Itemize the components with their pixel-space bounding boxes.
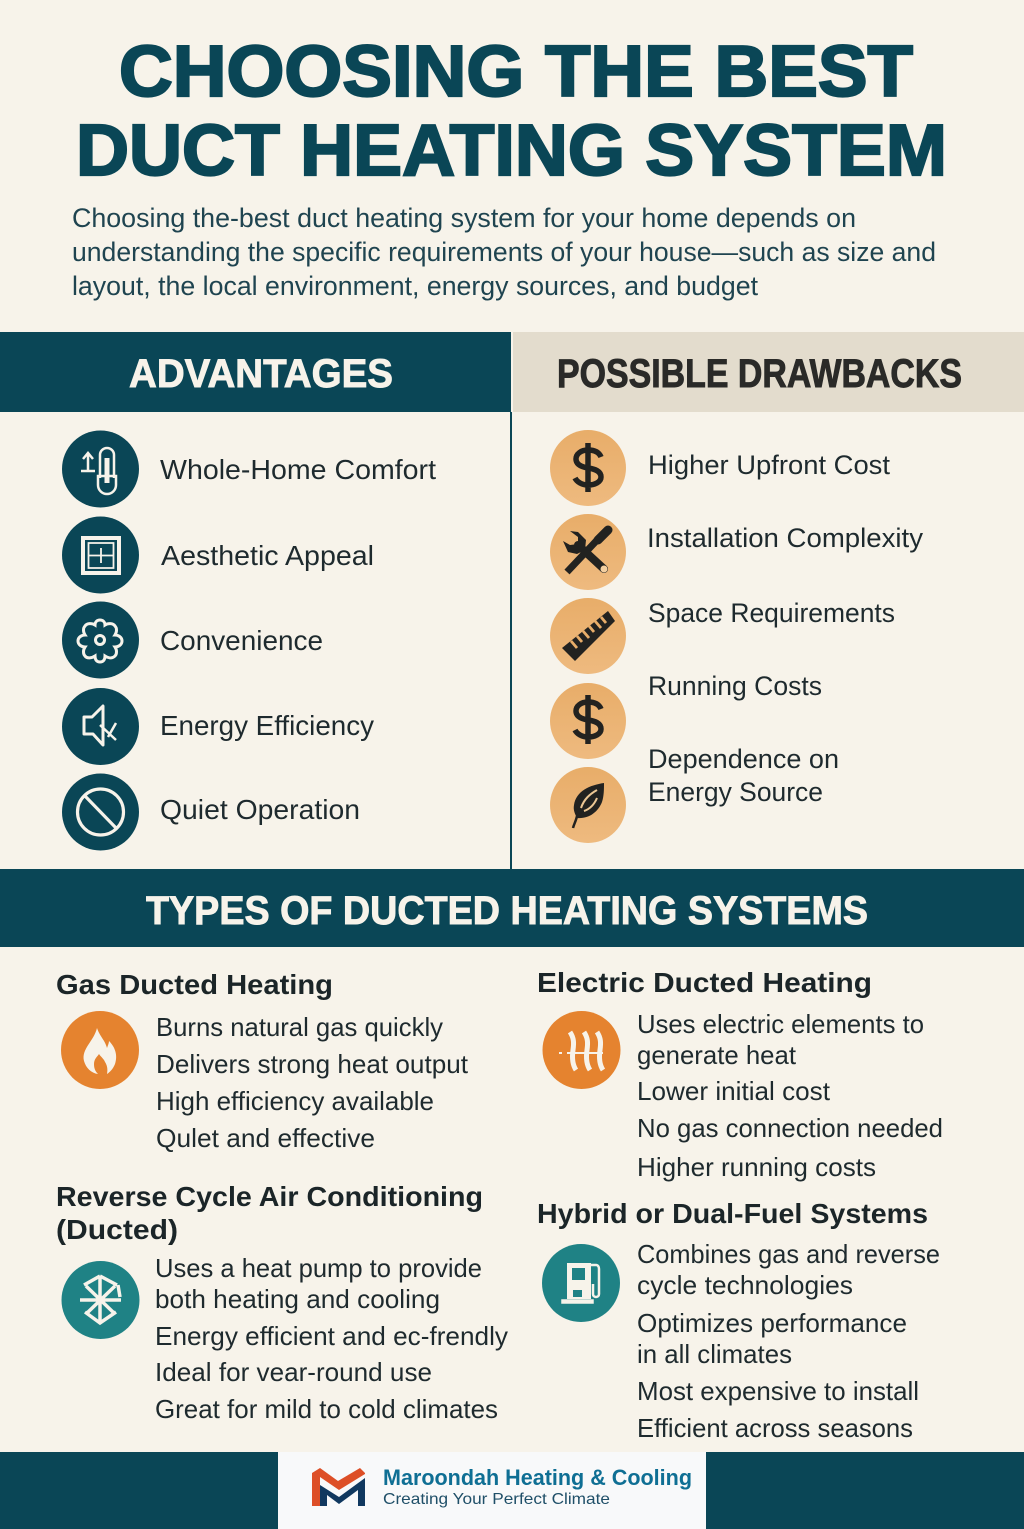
label: Higher Upfront Cost bbox=[648, 450, 890, 480]
label: Space Requirements bbox=[648, 598, 895, 628]
icon: leaf bbox=[550, 767, 626, 843]
brand text bbox=[383, 1465, 692, 1508]
icon: dollar bbox=[550, 430, 626, 506]
list: Efficient across seasons bbox=[637, 1413, 913, 1443]
list: High efficiency available bbox=[156, 1086, 434, 1116]
label: Dependence on bbox=[648, 744, 839, 774]
icon: fuel pump bbox=[542, 1244, 620, 1322]
icon: heating elements bbox=[542, 1011, 620, 1089]
icon: ruler bbox=[550, 598, 626, 674]
icon: prohibited bbox=[62, 774, 139, 850]
list bbox=[637, 1009, 943, 1182]
icon: logo mark bbox=[312, 1468, 365, 1506]
brand text: Creating Your Perfect Climate bbox=[383, 1491, 610, 1508]
panel: reverse cycle air conditioning: (Ducted) bbox=[56, 1214, 178, 1245]
list bbox=[155, 1253, 508, 1424]
icon: dollar bbox=[550, 683, 626, 759]
label: Energy Source bbox=[648, 777, 823, 807]
section band: types heading bbox=[0, 869, 1024, 947]
list: Uses a heat pump to provide bbox=[155, 1253, 482, 1283]
panel: drawbacks header bbox=[513, 332, 1024, 412]
intro text: Choosing the-best duct heating system for your home depends on bbox=[72, 203, 856, 233]
icon: thermometer bbox=[62, 430, 139, 508]
list bbox=[156, 1012, 469, 1153]
list: Qulet and effective bbox=[156, 1123, 375, 1153]
label: Running Costs bbox=[648, 671, 822, 701]
title: DUCT HEATING SYSTEM bbox=[76, 111, 947, 191]
title: CHOOSING THE BEST bbox=[119, 32, 913, 112]
icon: window bbox=[62, 516, 139, 594]
panel: drawbacks header: POSSIBLE DRAWBACKS bbox=[557, 352, 962, 396]
brand text: Maroondah Heating & Cooling bbox=[383, 1465, 692, 1490]
icon: snowflake bbox=[62, 1261, 140, 1339]
panel: advantages header bbox=[0, 332, 511, 412]
panel: hybrid or dual-fuel systems bbox=[537, 1198, 940, 1443]
label bbox=[648, 744, 839, 807]
list: in all climates bbox=[637, 1339, 792, 1369]
panel: electric ducted heating: Electric Ducted Heating bbox=[537, 967, 872, 998]
list: Lower initial cost bbox=[637, 1076, 831, 1106]
intro text: understanding the specific requirements of your house—such as size and bbox=[72, 237, 936, 267]
label: Aesthetic Appeal bbox=[161, 540, 374, 571]
list: Optimizes performance bbox=[637, 1308, 907, 1338]
list: Uses electric elements to bbox=[637, 1009, 924, 1039]
list: Great for mild to cold climates bbox=[155, 1394, 498, 1424]
list: both heating and cooling bbox=[155, 1284, 440, 1314]
label: Quiet Operation bbox=[160, 794, 360, 825]
label: Convenience bbox=[160, 625, 323, 656]
list: Delivers strong heat output bbox=[156, 1049, 469, 1079]
panel: reverse cycle air conditioning bbox=[56, 1181, 508, 1424]
icon: flame bbox=[61, 1011, 139, 1089]
panel: hybrid or dual-fuel systems: Hybrid or Dual-Fuel Systems bbox=[537, 1198, 928, 1229]
icon: tools bbox=[550, 514, 626, 590]
panel: drawbacks list bbox=[550, 430, 924, 843]
label: Installation Complexity bbox=[647, 523, 924, 553]
panel: reverse cycle air conditioning: Reverse Cycle Air Conditioning bbox=[56, 1181, 483, 1212]
list: Energy efficient and ec-frendly bbox=[155, 1321, 508, 1351]
list: cycle technologies bbox=[637, 1270, 853, 1300]
list: Burns natural gas quickly bbox=[156, 1012, 443, 1042]
icon: speaker muted bbox=[62, 688, 139, 765]
list: Ideal for vear-round use bbox=[155, 1357, 432, 1387]
list: Combines gas and reverse bbox=[637, 1239, 940, 1269]
panel: gas ducted heating: Gas Ducted Heating bbox=[56, 969, 333, 1000]
panel: electric ducted heating bbox=[537, 967, 943, 1182]
list: Most expensive to install bbox=[637, 1376, 919, 1406]
label: Energy Efficiency bbox=[160, 710, 374, 741]
footer bbox=[0, 1452, 1024, 1529]
icon: gear bbox=[62, 602, 139, 678]
section band: types heading: TYPES OF DUCTED HEATING SYSTEMS bbox=[146, 889, 868, 933]
panel: gas ducted heating bbox=[56, 969, 469, 1153]
list: Higher running costs bbox=[637, 1152, 876, 1182]
panel: advantages list bbox=[62, 430, 436, 850]
panel: advantages header: ADVANTAGES bbox=[129, 352, 393, 396]
title bbox=[76, 32, 947, 191]
list: No gas connection needed bbox=[637, 1113, 943, 1143]
intro text bbox=[72, 203, 936, 301]
label: Whole-Home Comfort bbox=[160, 454, 436, 485]
list: generate heat bbox=[637, 1040, 797, 1070]
intro text: layout, the local environment, energy sources, and budget bbox=[72, 271, 758, 301]
list bbox=[637, 1239, 940, 1443]
